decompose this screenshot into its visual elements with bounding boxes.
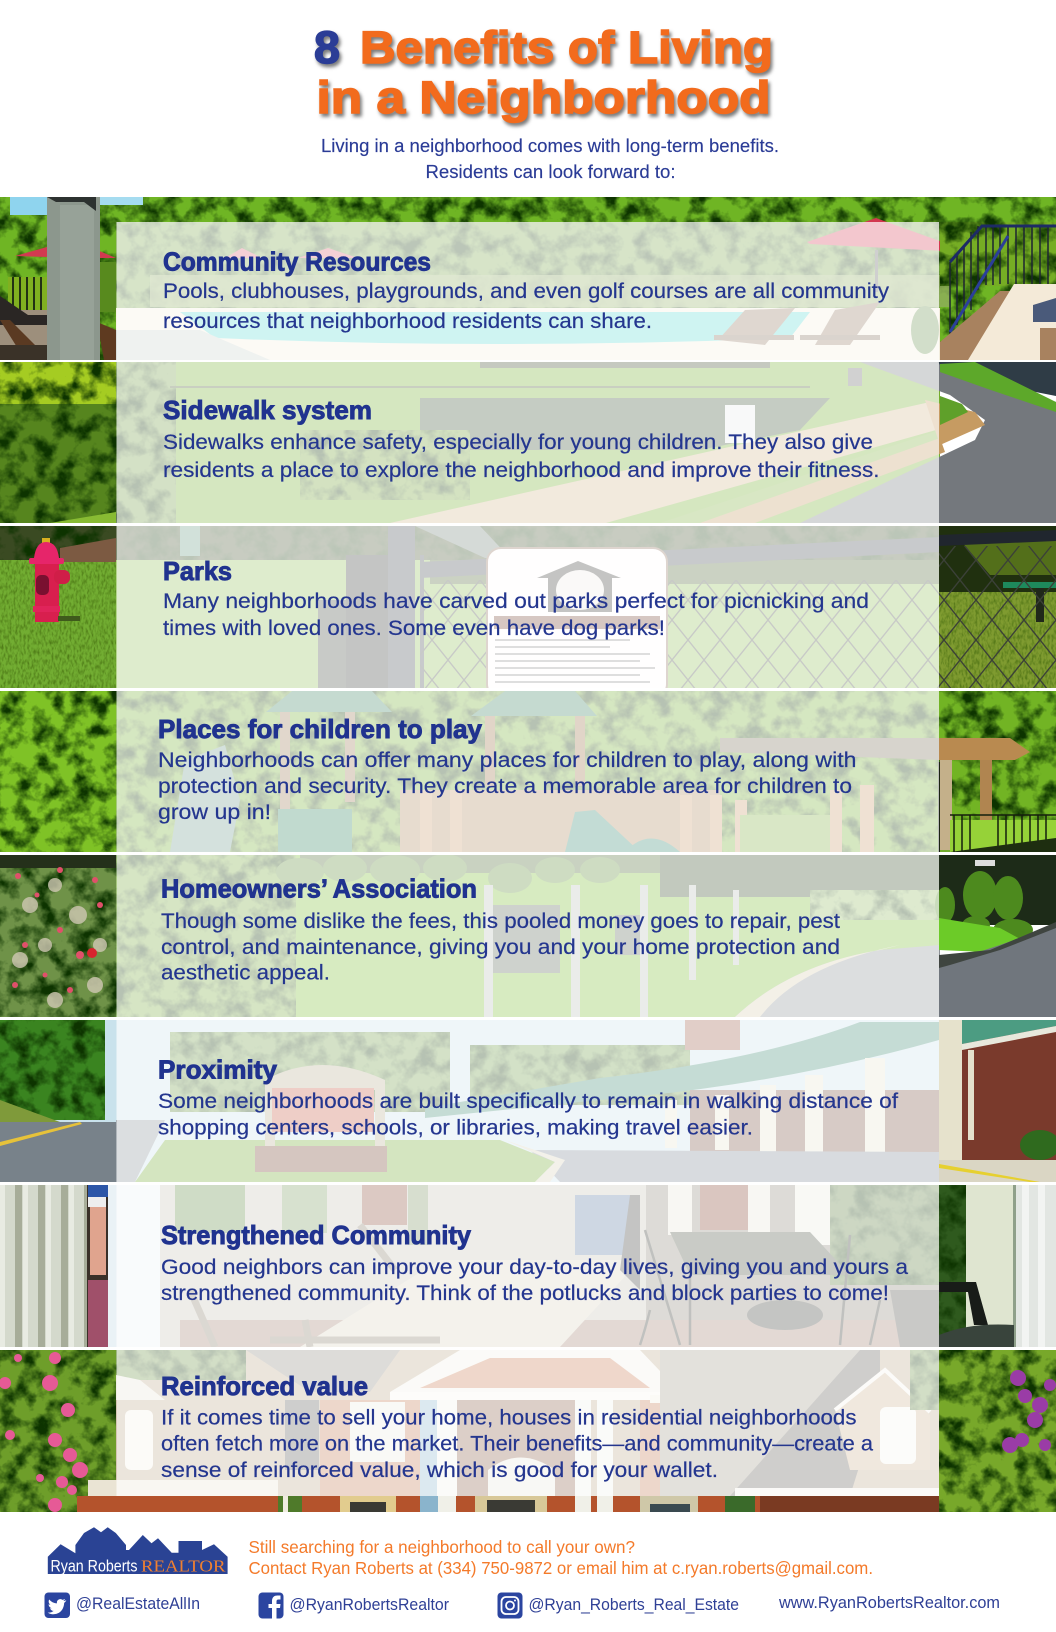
photo: playground (0, 691, 1056, 852)
panel: parks (0, 526, 1056, 698)
body text: If it comes time to sell your home, houses in residential neighborhoods (161, 1406, 856, 1430)
body text: Sidewalks enhance safety, especially for young children. They also give (163, 431, 873, 454)
icon: instagram (498, 1592, 522, 1618)
panel: places for children to play (0, 691, 1056, 852)
hydrant (29, 538, 80, 622)
heading: Homeowners’ Association (161, 874, 477, 904)
title: Benefits of Living (360, 22, 773, 73)
panel: homeowners association (0, 854, 1056, 1017)
body text (158, 749, 856, 824)
translucent panel (116, 1350, 939, 1496)
photo: mailboxes and lawn (0, 854, 1056, 1017)
heading: Strengthened Community (161, 1220, 472, 1250)
call to action: Contact Ryan Roberts at (334) 750-9872 or email him at c.ryan.roberts@gmail.com. (248, 1558, 873, 1578)
body text: Some neighborhoods are built specifically to remain in walking distance of (158, 1090, 898, 1113)
social: instagram: @Ryan_Roberts_Real_Estate (528, 1595, 739, 1614)
photo: patio (0, 1185, 1056, 1347)
body text: Good neighbors can improve your day-to-day lives, giving you and yours a (161, 1256, 908, 1279)
panel: proximity (0, 1020, 1056, 1182)
icon: twitter (44, 1592, 70, 1618)
body text: Many neighborhoods have carved out parks perfect for picnicking and (163, 590, 869, 613)
title: in a Neighborhood (316, 72, 770, 123)
body text (158, 1090, 898, 1140)
icon: facebook (258, 1592, 284, 1618)
body text (161, 1256, 908, 1305)
call to action (248, 1537, 873, 1578)
social: twitter: @RealEstateAllIn (76, 1594, 200, 1613)
call to action: Still searching for a neighborhood to call your own? (248, 1537, 635, 1557)
heading: Proximity (158, 1054, 278, 1084)
translucent panel (116, 526, 939, 688)
translucent panel (116, 362, 939, 523)
photo: pool area (0, 197, 1056, 360)
logo: Ryan Roberts Realtor (48, 1527, 228, 1576)
photo: school building (0, 1020, 1056, 1182)
body text (161, 910, 840, 984)
title (314, 22, 773, 123)
body text (163, 590, 869, 640)
heading: Sidewalk system (163, 395, 372, 425)
body text (163, 280, 890, 333)
body text: Though some dislike the fees, this pooled money goes to repair, pest (161, 910, 840, 933)
body text: grow up in! (158, 801, 271, 824)
social: twitter (44, 1592, 200, 1618)
title: 8 (314, 22, 340, 73)
panel: sidewalk system (0, 362, 1056, 523)
social: instagram (498, 1592, 739, 1618)
body text: Neighborhoods can offer many places for children to play, along with (158, 749, 856, 772)
intro text (321, 135, 779, 182)
body text: sense of reinforced value, which is good for your wallet. (161, 1459, 718, 1482)
body text: Pools, clubhouses, playgrounds, and even golf courses are all community (163, 280, 890, 303)
body text: residents a place to explore the neighborhood and improve their fitness. (163, 459, 880, 482)
translucent panel (116, 222, 939, 360)
photo: pond and sidewalk (0, 362, 1056, 523)
panel: strengthened community (0, 1185, 1056, 1347)
body text: often fetch more on the market. Their benefits—and community—create a (161, 1432, 873, 1456)
sign (487, 548, 667, 698)
translucent panel (116, 691, 939, 852)
body text: strengthened community. Think of the potlucks and block parties to come! (161, 1282, 889, 1305)
heading: Places for children to play (158, 714, 483, 744)
panel: reinforced value (0, 1350, 1056, 1512)
heading: Parks (163, 556, 232, 586)
body text (163, 431, 880, 482)
intro text: Residents can look forward to: (426, 161, 676, 182)
intro text: Living in a neighborhood comes with long-term benefits. (321, 135, 779, 156)
translucent panel (116, 1020, 939, 1182)
body text: resources that neighborhood residents can share. (163, 310, 652, 333)
photo: brick house (0, 1350, 1056, 1512)
social: facebook: @RyanRobertsRealtor (290, 1595, 449, 1614)
body text: shopping centers, schools, or libraries, making travel easier. (158, 1116, 753, 1140)
translucent panel (116, 1185, 939, 1347)
body text (161, 1406, 873, 1482)
body text: control, and maintenance, giving you and your home protection and (161, 936, 840, 959)
heading: Reinforced value (161, 1371, 368, 1401)
logo: Ryan Roberts Realtor: REALTOR (141, 1556, 226, 1576)
social: facebook (258, 1592, 449, 1618)
body text: times with loved ones. Some even have dog parks! (163, 617, 665, 640)
panel: community resources (0, 197, 1056, 360)
body text: aesthetic appeal. (161, 962, 330, 984)
body text: protection and security. They create a memorable area for children to (158, 775, 852, 798)
heading: Community Resources (163, 246, 431, 276)
translucent panel (116, 855, 939, 1017)
logo: Ryan Roberts Realtor: Ryan Roberts (50, 1556, 138, 1576)
website: www.RyanRobertsRealtor.com (778, 1593, 1000, 1612)
photo: gate and hydrant (0, 526, 1056, 698)
